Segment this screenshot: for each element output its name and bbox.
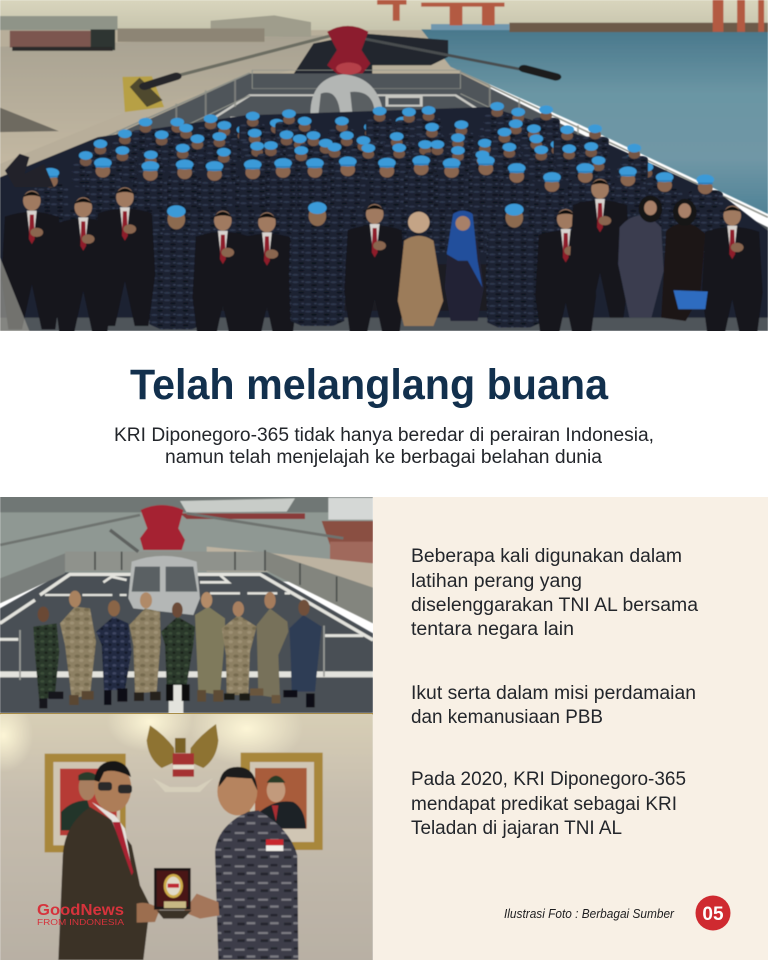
docked dark ship: [294, 33, 448, 74]
point 1: war exercises: tentara negara lain: [411, 619, 574, 640]
right portrait frame: [241, 753, 323, 850]
logo: GoodNews from Indonesia: FROM INDONESIA: [37, 917, 124, 927]
rotor blades: [144, 35, 556, 86]
point 2: UN missions: [411, 683, 696, 728]
woman in blue: [445, 211, 484, 321]
flight deck: [0, 572, 373, 713]
harbour water: [421, 29, 768, 214]
back rows of peacekeepers: [72, 102, 660, 199]
point 1: war exercises: Beberapa kali digunakan dalam: [411, 546, 682, 567]
officer 9 navy: [283, 600, 322, 707]
subtitle: namun telah menjelajah ke berbagai belahan dunia: [165, 447, 602, 468]
garuda emblem: [147, 724, 218, 792]
point 3: 2020 award: [411, 769, 686, 839]
helicopter: [110, 505, 200, 615]
officer 6 desert: [195, 592, 225, 702]
plaque: [154, 868, 192, 919]
panel: key points: [373, 497, 768, 960]
officer 3 navy camo: [96, 600, 132, 705]
crowd mass: [0, 107, 768, 318]
distant shore and cranes: [377, 0, 768, 32]
point 3: 2020 award: mendapat predikat sebagai KRI: [411, 794, 677, 815]
dock: [207, 547, 373, 588]
lower-left deck sunlight: [0, 257, 29, 331]
photo credit: Ilustrasi Foto : Berbagai Sumber: [504, 906, 675, 921]
point 3: 2020 award: Teladan di jajaran TNI AL: [411, 818, 622, 839]
subtitle: KRI Diponegoro-365 tidak hanya beredar di perairan Indonesia,: [114, 425, 654, 446]
point 1: war exercises: [411, 546, 698, 640]
nine officers: [33, 591, 322, 708]
officer 4 desert: [129, 592, 161, 701]
point 1: war exercises: diselenggarakan TNI AL bersama: [411, 595, 698, 616]
raised-arm man: [5, 154, 54, 187]
women on the right with handbag: [618, 196, 708, 321]
page number badge: [696, 896, 730, 930]
navy officer with flag patch: [183, 767, 298, 960]
officer 5 green camo: [161, 602, 195, 701]
ship deck: [0, 74, 768, 331]
left portrait frame: [45, 754, 126, 852]
officer 7 desert: [222, 601, 257, 701]
point 2: UN missions: Ikut serta dalam misi perdamaian: [411, 683, 696, 704]
subtitle: [114, 425, 654, 468]
officer 2 desert: [60, 591, 96, 705]
photo: crew on helicopter deck: [0, 0, 768, 331]
stanchions: [20, 626, 324, 680]
deck railings: [0, 70, 768, 241]
logo: GoodNews from Indonesia: [37, 902, 124, 927]
background ships: [0, 495, 373, 563]
dock base: [0, 28, 490, 331]
photo: officers on helipad: [0, 497, 373, 713]
officer 8 desert olive: [250, 592, 288, 703]
point 1: war exercises: latihan perang yang: [411, 571, 582, 592]
rotor blades: [0, 513, 343, 545]
helipad markings: [216, 95, 490, 118]
seated and standing dignitaries: [1, 179, 763, 351]
sky: [0, 0, 768, 30]
helicopter: [310, 26, 384, 124]
point 2: UN missions: dan kemanusiaan PBB: [411, 707, 603, 728]
page number badge: 05: [702, 904, 724, 925]
point 3: 2020 award: Pada 2020, KRI Diponegoro-365: [411, 769, 686, 790]
woman in beige dress: [398, 212, 443, 326]
title: [114, 361, 654, 468]
title: Telah melanglang buana: [130, 361, 609, 409]
logo: GoodNews from Indonesia: GoodNews: [37, 902, 124, 919]
dockside: [0, 35, 323, 164]
truck: [10, 29, 115, 51]
photo: plaque exchange: [0, 714, 373, 960]
gold divider strip: [0, 713, 373, 715]
deck markings: [0, 574, 373, 713]
tail boom marker: [122, 76, 164, 112]
man in brown suit with glasses: [58, 761, 160, 960]
officer 1 green camo: [33, 607, 63, 708]
wall lights: [0, 692, 303, 772]
shore buildings: [0, 15, 311, 42]
railings: [0, 550, 373, 623]
front row of peacekeepers: [29, 155, 735, 252]
